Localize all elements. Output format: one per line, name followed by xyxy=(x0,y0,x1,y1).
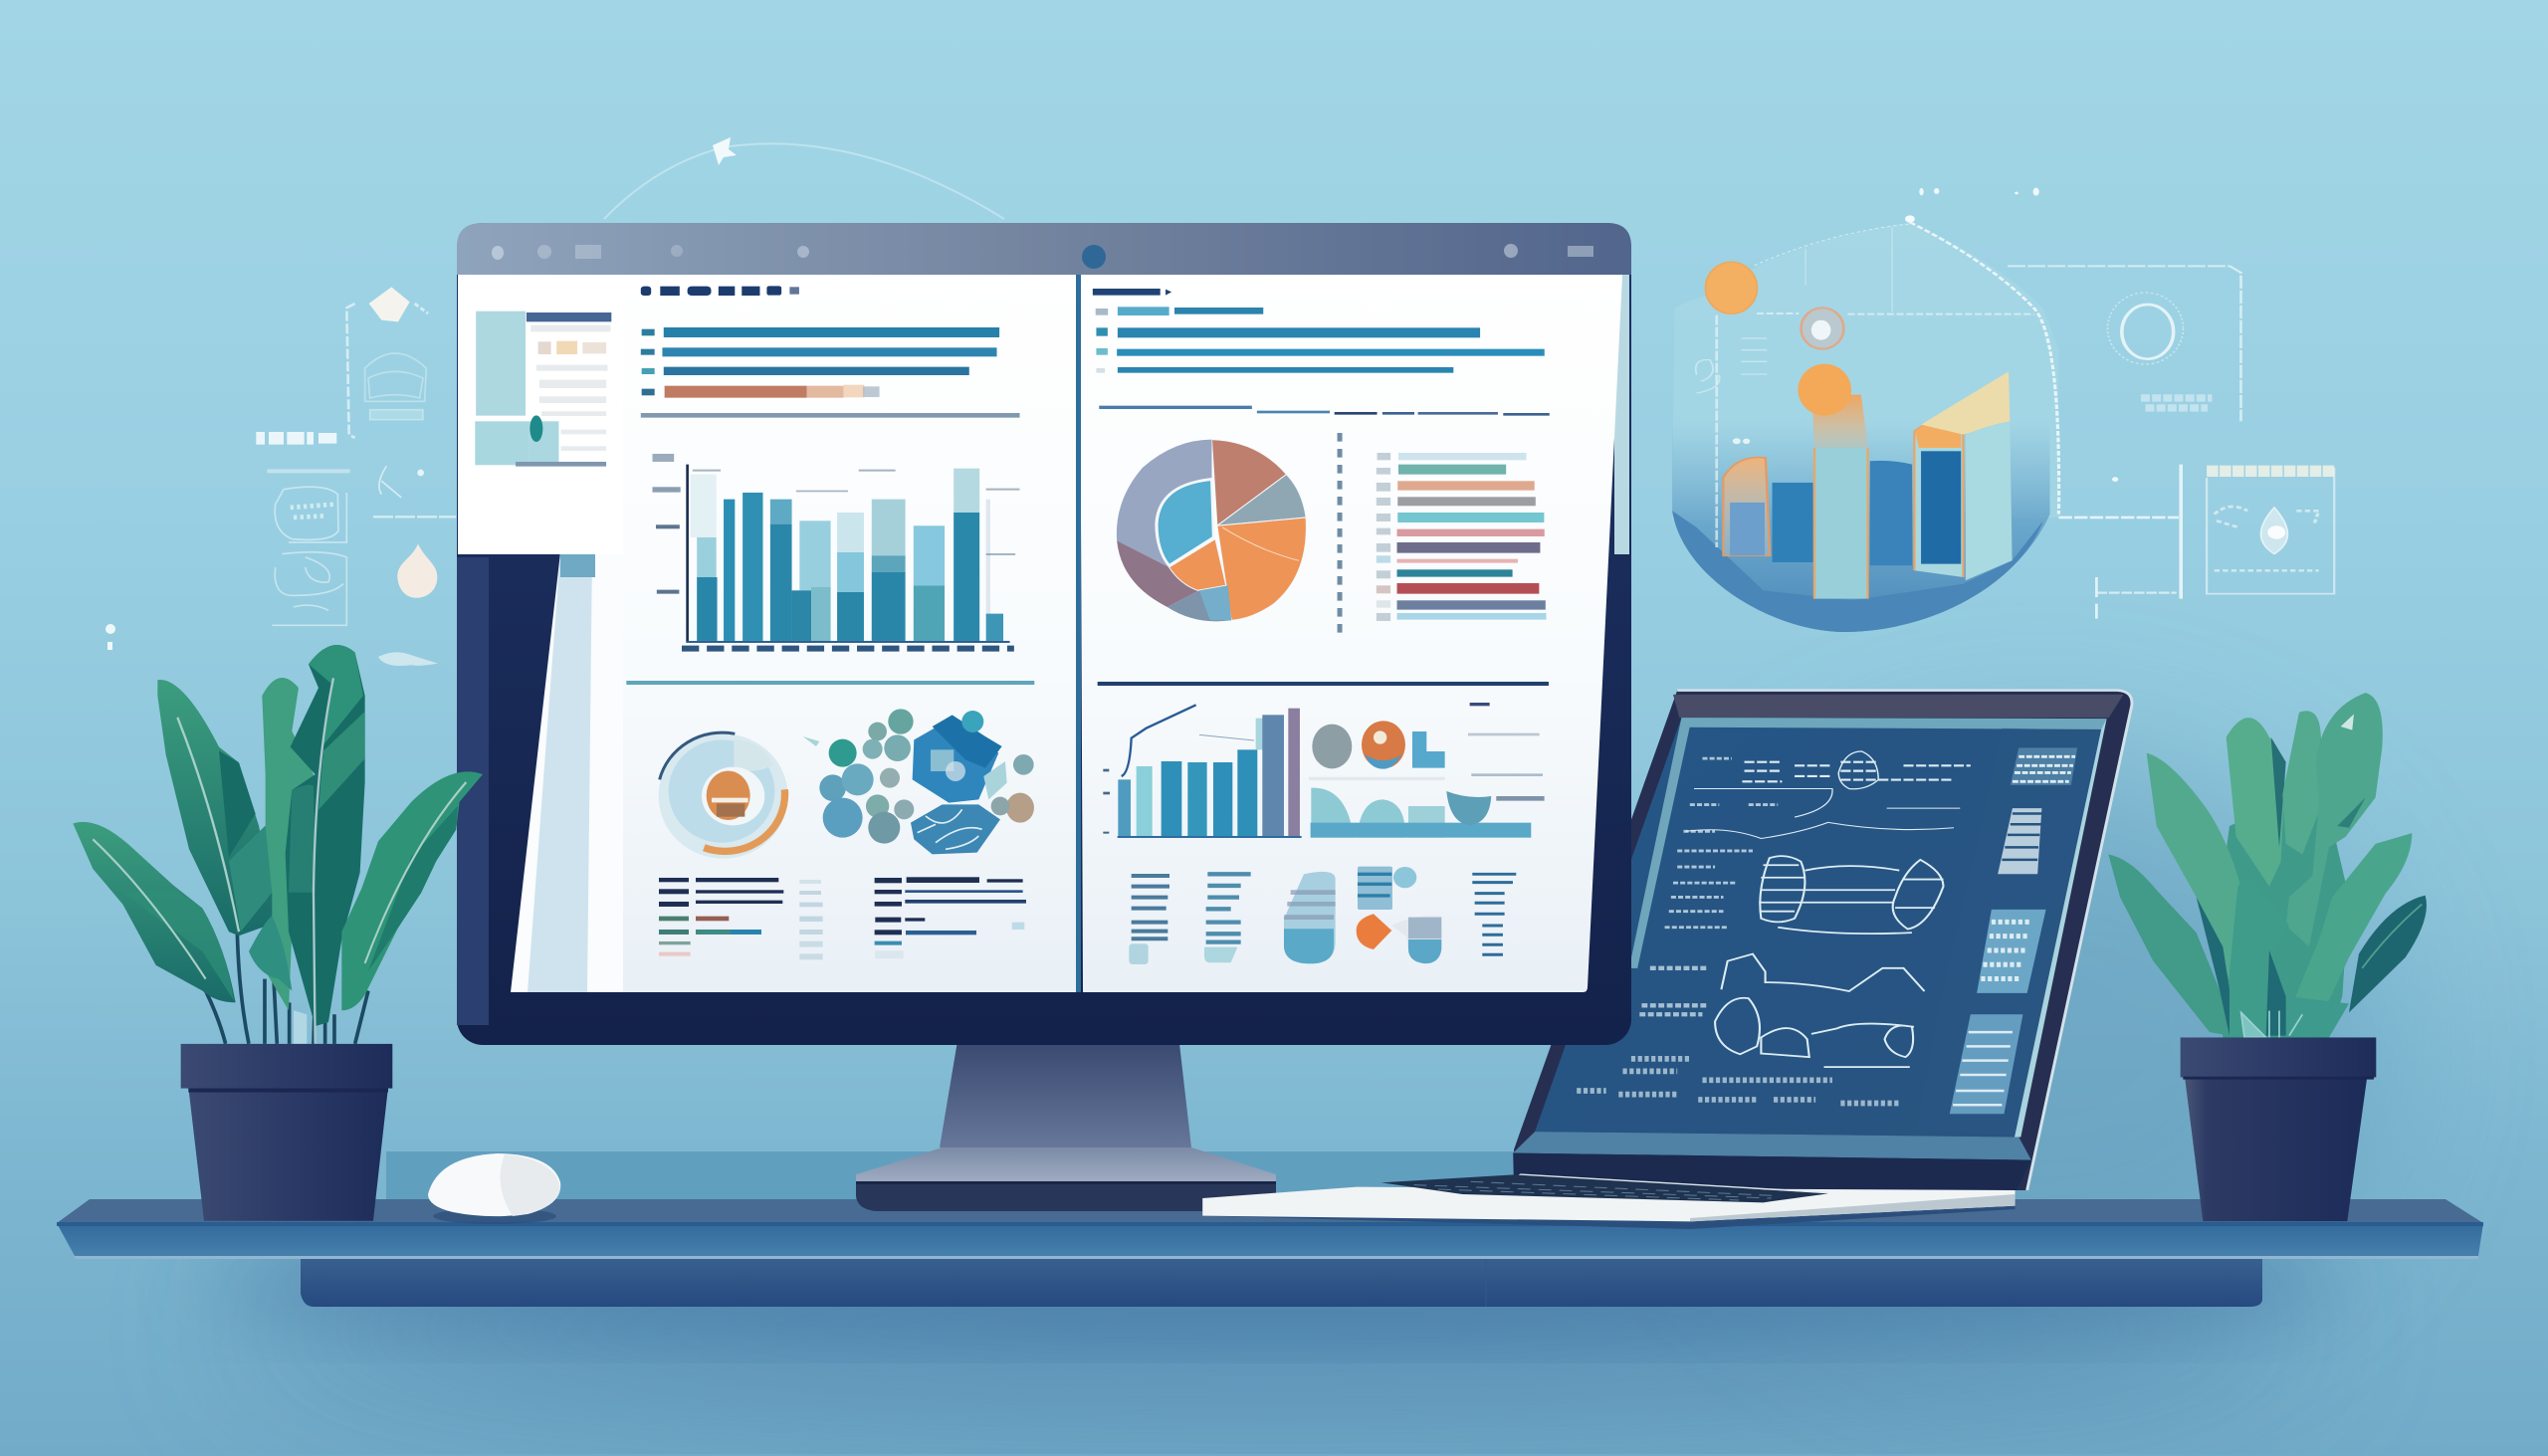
keyboard xyxy=(1381,1174,1828,1202)
screen xyxy=(1535,718,2107,1137)
shelf top xyxy=(57,1199,2483,1223)
leaf: top right xyxy=(2286,693,2383,946)
center panel: lower section xyxy=(626,681,1034,959)
plant mass xyxy=(2217,783,2349,1037)
monitor title bar xyxy=(457,223,1631,275)
right panel: lower section xyxy=(1098,682,1549,964)
center panel sheet xyxy=(623,275,1077,992)
right panel sheet xyxy=(1080,275,1622,992)
header blobs xyxy=(641,286,799,296)
icon: bowl sketch xyxy=(365,353,426,420)
horizontal bars xyxy=(641,327,1019,418)
donut gauge xyxy=(659,732,788,859)
hologram chart xyxy=(1672,188,2334,632)
desk shelf xyxy=(57,1199,2483,1307)
leaf: upper-left xyxy=(157,680,272,936)
right bezel light strip xyxy=(1614,275,1629,554)
axis ticks xyxy=(1333,433,1347,637)
leaf: right xyxy=(341,771,483,1010)
leaf: far left xyxy=(2108,855,2230,1036)
right panel: header, bars, pie and legend xyxy=(1093,289,1550,686)
icon: rounded sketch lower xyxy=(272,552,346,625)
right plant xyxy=(2108,693,2427,1037)
dark back leaf xyxy=(2197,897,2246,1036)
oval sketch row 1 xyxy=(1838,751,1878,789)
mouse xyxy=(428,1153,560,1224)
bar chart xyxy=(652,454,1019,649)
oval sketch row 2 xyxy=(1760,856,1805,922)
stems xyxy=(206,932,368,1044)
monitor xyxy=(457,223,1631,1211)
leaf: center lower xyxy=(2230,876,2289,1036)
back ledge strip behind monitor xyxy=(386,1151,1541,1201)
monitor stand neck xyxy=(940,1035,1191,1147)
rounded metric shapes xyxy=(1309,703,1545,838)
pie chart xyxy=(1117,440,1306,621)
cluster bubbles xyxy=(803,709,1034,854)
line sketch row 3 xyxy=(1721,954,1925,991)
under shelf block xyxy=(301,1259,2262,1307)
icon: cube xyxy=(369,287,410,321)
bar lists xyxy=(659,877,1026,959)
laptop lid and screen xyxy=(1513,691,2132,1190)
inset mini dashboard xyxy=(475,312,611,467)
icon: rounded sketch upper xyxy=(275,487,346,542)
cloud blob xyxy=(378,652,438,666)
floating arc above monitor xyxy=(604,137,1004,219)
leaf: top xyxy=(2227,718,2286,887)
icon: orbit sketch xyxy=(379,466,401,498)
shelf front xyxy=(57,1223,2483,1256)
left pot xyxy=(181,1044,392,1221)
divider xyxy=(1098,682,1548,686)
orange nodes xyxy=(1706,262,1757,313)
back leaf xyxy=(262,678,314,1010)
screen sketch xyxy=(1577,747,2077,1114)
leaf: center tall xyxy=(286,645,365,1044)
small center leaf xyxy=(249,916,292,991)
legend bars xyxy=(1377,453,1547,621)
monitor base front on shelf xyxy=(856,1184,1276,1211)
bars xyxy=(1723,371,2013,599)
panel divider line xyxy=(1076,275,1081,992)
dome xyxy=(1672,222,2058,520)
monitor stand base xyxy=(856,1147,1276,1211)
small sketch marks xyxy=(1696,338,1767,393)
left floating icons xyxy=(256,287,456,666)
divider xyxy=(626,681,1034,685)
right frame xyxy=(2008,266,2334,619)
leaf: top center xyxy=(2282,711,2326,855)
monitor body xyxy=(457,223,1631,1045)
right pot xyxy=(2181,1037,2376,1221)
oval sketch row 4 xyxy=(1715,998,1914,1057)
label blobs xyxy=(256,432,336,445)
center panel: header, horizontal bars and stacked bar chart xyxy=(641,286,1019,649)
folded lower-left sheet xyxy=(511,552,623,992)
left small dots xyxy=(106,624,115,650)
bowl xyxy=(1672,421,2050,632)
bottom columns xyxy=(1129,867,1516,964)
left plant xyxy=(73,645,483,1044)
leaf base xyxy=(2286,996,2349,1037)
horizontal bars xyxy=(1096,307,1550,416)
leaf: upper left xyxy=(2147,753,2266,1007)
top-left white panel xyxy=(458,275,627,554)
divider xyxy=(1098,682,1549,686)
laptop keyboard base xyxy=(1202,1174,2016,1229)
header xyxy=(1093,289,1171,296)
leaf: mid right xyxy=(2292,833,2412,1032)
leaf: dark right xyxy=(2349,896,2427,1012)
side text panels xyxy=(1950,747,2077,1114)
lid xyxy=(1514,691,2132,1190)
leaf: left xyxy=(73,822,236,1002)
bar and line chart xyxy=(1103,705,1302,838)
chin and hinge xyxy=(1513,1132,2031,1160)
icon: water drop xyxy=(397,544,437,598)
